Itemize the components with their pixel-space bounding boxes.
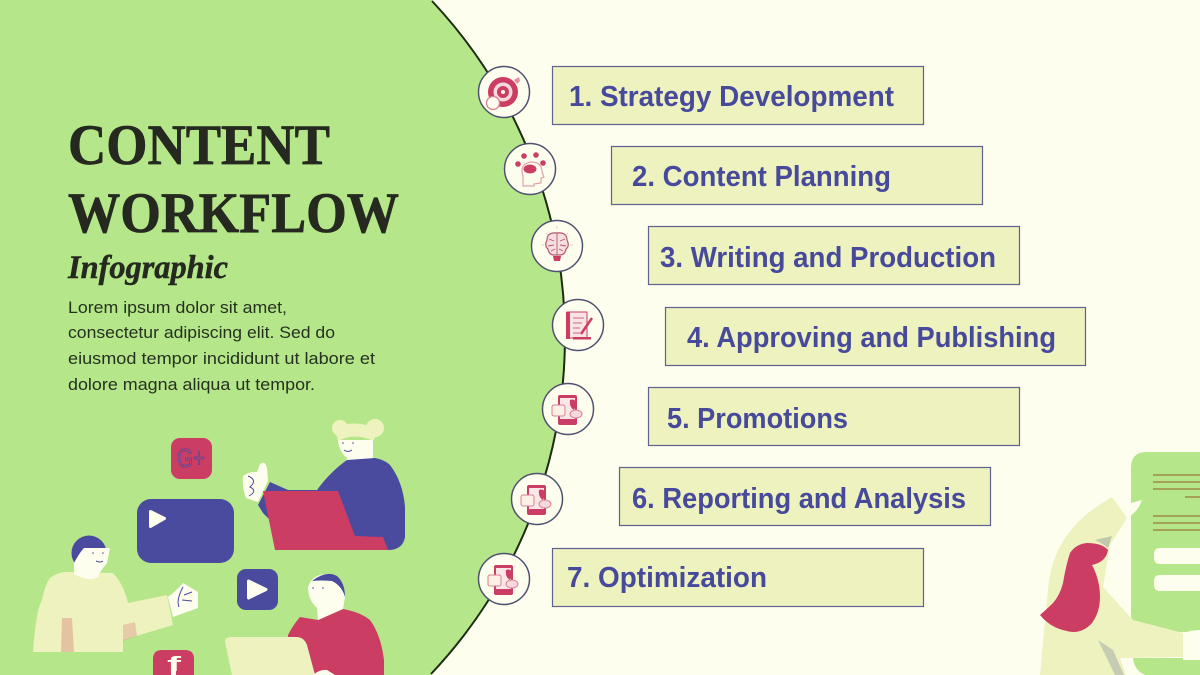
step 2 [612, 146, 982, 204]
icon: head with ideas [504, 144, 556, 194]
step 2: 2. Content Planning [632, 161, 891, 193]
icon: video player [137, 499, 234, 563]
icon: brain bulb [532, 220, 582, 272]
step 6: 6. Reporting and Analysis [632, 483, 966, 515]
title [68, 114, 399, 245]
panel: green semicircle [0, 0, 566, 675]
icon: phone chat [512, 474, 562, 524]
step 5: 5. Promotions [667, 403, 848, 435]
step 1: 1. Strategy Development [569, 81, 894, 113]
step 1 [552, 66, 924, 124]
step 7: 7. Optimization [567, 562, 767, 594]
illustration: woman with laptop [243, 419, 405, 550]
body text: consectetur adipiscing elit. Sed do [68, 323, 335, 342]
step 4 [666, 308, 1086, 366]
body text: eiusmod tempor incididunt ut labore et [68, 349, 375, 368]
illustration: man with laptop [225, 574, 384, 675]
icon: small play tile [237, 569, 278, 610]
icon: google plus tile: G+ [177, 443, 205, 473]
body text: dolore magna aliqua ut tempor. [68, 375, 315, 394]
icon: google plus tile [171, 438, 212, 479]
subtitle: Infographic [67, 250, 228, 286]
step 6 [620, 468, 990, 526]
icon: phone chat [478, 554, 530, 604]
connector circles and icons [478, 66, 604, 604]
title: WORKFLOW [68, 182, 399, 245]
icon: phone chat [542, 384, 594, 434]
step 5 [648, 388, 1020, 446]
step 7 [552, 548, 924, 606]
body text [68, 298, 375, 394]
icon: target [478, 66, 530, 118]
icon: facebook tile [153, 650, 194, 675]
illustration: man gesturing [33, 536, 198, 652]
step 4: 4. Approving and Publishing [687, 322, 1056, 354]
step 3: 3. Writing and Production [660, 242, 996, 274]
step 3 [648, 226, 1020, 284]
title: CONTENT [68, 114, 330, 177]
icon: document and pen [552, 300, 604, 350]
illustration: woman with tablet [1040, 452, 1200, 675]
body text: Lorem ipsum dolor sit amet, [68, 298, 287, 317]
